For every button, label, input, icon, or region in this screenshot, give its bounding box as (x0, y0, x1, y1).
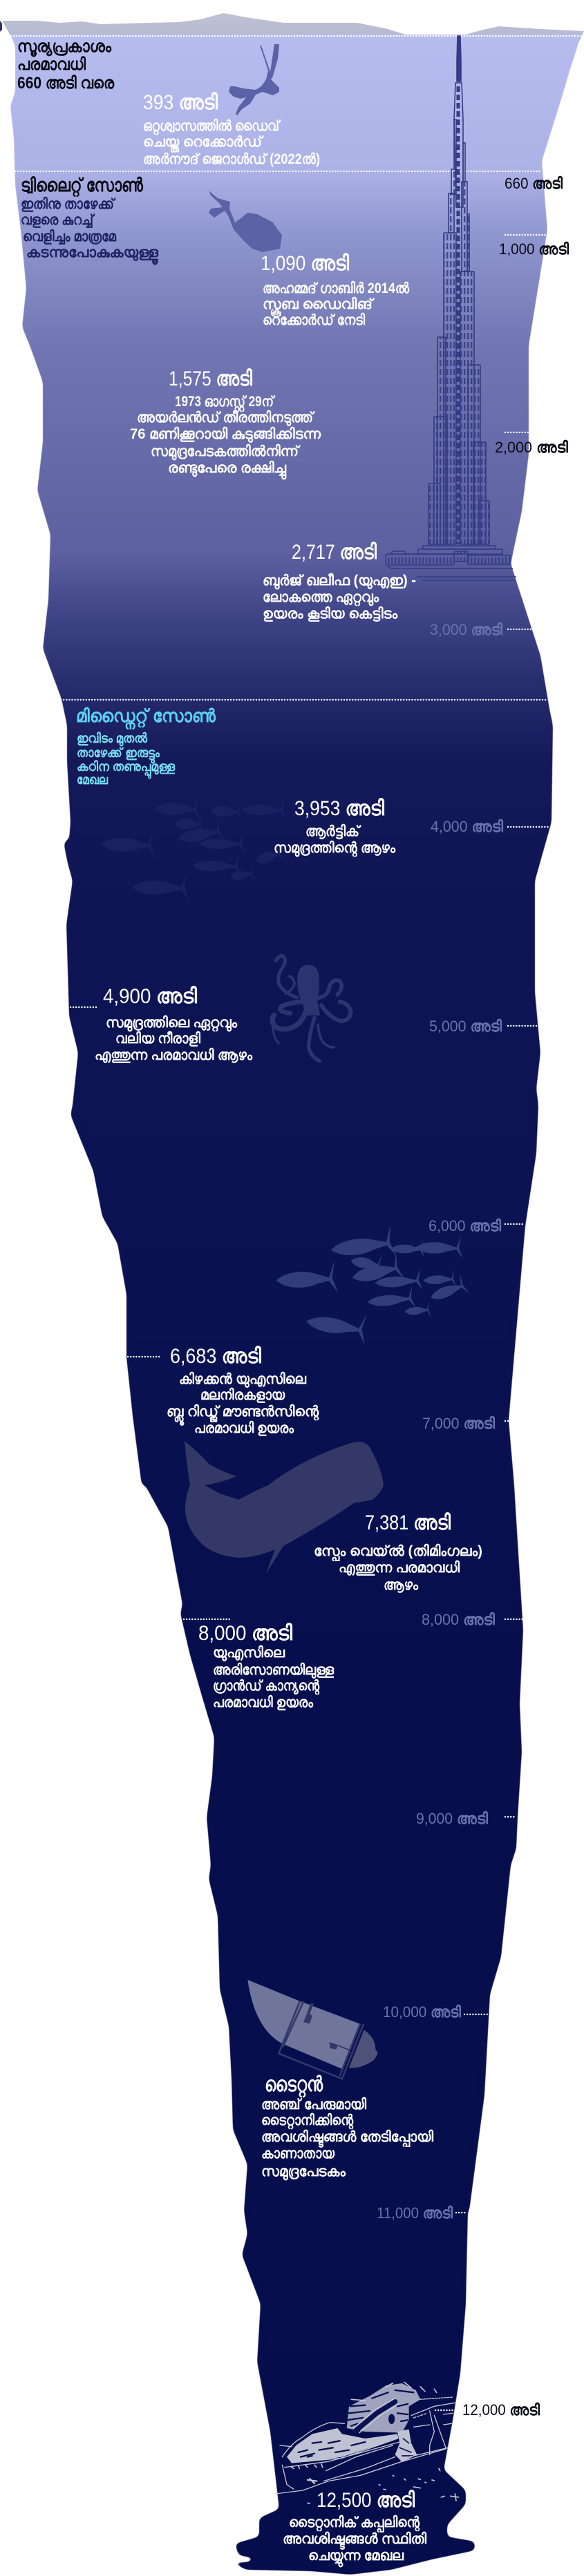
callout: 12500 ft Titanic wreck: ടൈറ്റാനിക് കപ്പലിന്റെ (289, 2514, 420, 2533)
callout: 3953 ft Arctic (274, 797, 396, 857)
callout: Titan submersible: അഞ്ച് പേരുമായി (261, 2096, 366, 2112)
icon: Titanic wreck (275, 2382, 458, 2503)
label: 12000 ft: 12,000 അടി (462, 2401, 540, 2418)
callout: 1575 ft rescue: 1973 ഓഗസ്റ്റ് 29ന് (175, 394, 276, 412)
callout: 4900 ft octopus: എത്തുന്ന പരമാവധി ആഴം (95, 1047, 253, 1064)
callout: Titan submersible: കാണാതായ (261, 2146, 335, 2162)
callout: 12500 ft Titanic wreck: ചെയ്യുന്ന മേഖല (308, 2548, 404, 2568)
heading: sunlight zone: 660 അടി വരെ (17, 74, 115, 93)
callout: 1575 ft rescue: രണ്ടുപേരെ രക്ഷിച്ചു (168, 459, 287, 480)
callout: 1575 ft rescue (130, 368, 321, 480)
callout: 2717 ft Burj Khalifa (263, 541, 416, 622)
callout: 1575 ft rescue: അയർലൻഡ് തീരത്തിനടുത്ത് (137, 409, 315, 426)
callout: 2717 ft Burj Khalifa: ബുർജ് ഖലീഫ (യുഎഇ) - (263, 572, 416, 589)
icon: scuba diver (209, 191, 282, 252)
callout: 7381 ft sperm whale: ആഴം (384, 1577, 419, 1594)
callout: 3953 ft Arctic: 3,953 അടി (294, 797, 384, 820)
callout: Titan submersible (261, 2073, 433, 2180)
heading: twilight zone: ഇതിനു താഴേക്ക് (21, 195, 116, 212)
callout: 1090 ft scuba record: റെക്കോർഡ് നേടി (263, 312, 365, 328)
label: 660 ft: 660 അടി (505, 175, 563, 192)
callout: 4900 ft octopus: വലിയ നീരാളി (115, 1030, 200, 1047)
callout: 8000 ft Grand Canyon: യുഎസിലെ (213, 1644, 285, 1661)
callout: 2717 ft Burj Khalifa: ഉയരം കൂടിയ കെട്ടിടം (263, 605, 398, 622)
icon: faint fish school (101, 796, 286, 901)
callout: 7381 ft sperm whale: സ്പേം വെയ്ൽ (തിമിംഗലം) (314, 1543, 482, 1562)
heading: sunlight zone (17, 37, 115, 93)
callout: 393 ft free dive record: ചെയ്ത റെക്കോർഡ് (143, 134, 264, 153)
callout: Titan submersible: ടൈറ്റൻ (265, 2073, 323, 2098)
icon: Burj Khalifa tower (386, 36, 516, 580)
callout: 1575 ft rescue: 76 മണിക്കൂറായി കുടുങ്ങിക്കിടന്ന (130, 426, 321, 443)
callout: 8000 ft Grand Canyon: അരിസോണയിലുള്ള (213, 1661, 335, 1679)
heading: midnight zone: താഴേക്ക് ഇരുട്ടും (77, 746, 160, 764)
callout: 1090 ft scuba record: സ്കൂബ ഡൈവിങ് (263, 296, 375, 317)
callout: 7381 ft sperm whale (314, 1511, 482, 1594)
label: 11000 ft: 11,000 അടി (377, 2204, 453, 2222)
icon: Titan submersible (247, 1980, 378, 2079)
label: 4000 ft: 4,000 അടി (431, 818, 503, 835)
heading: midnight zone: മിഡ്നൈറ്റ് സോൺ (76, 705, 216, 729)
callout: 4900 ft octopus (95, 985, 253, 1064)
heading: twilight zone: വെളിച്ചം മാത്രമേ (23, 228, 117, 245)
label: 3000 ft: 3,000 അടി (430, 621, 502, 638)
label: 10000 ft: 10,000 അടി (383, 2003, 461, 2021)
callout: 1575 ft rescue: 1,575 അടി (169, 368, 252, 390)
callout: 8000 ft Grand Canyon: 8,000 അടി (198, 1622, 292, 1645)
callout: 393 ft free dive record: ഒറ്റശ്വാസത്തിൽ ഡൈവ് (143, 117, 281, 135)
callout: 8000 ft Grand Canyon: പരമാവധി ഉയരം (213, 1694, 314, 1711)
heading: twilight zone: ട്വിലൈറ്റ് സോൺ (21, 175, 144, 198)
label: 6000 ft: 6,000 അടി (428, 1217, 501, 1234)
heading: midnight zone: ഇവിടം മുതൽ (77, 731, 148, 747)
label: 5000 ft: 5,000 അടി (429, 1018, 502, 1035)
callout: Titan submersible: അവശിഷ്ടങ്ങൾ തേടിപ്പോയി (261, 2128, 433, 2148)
callout: 12500 ft Titanic wreck: 12,500 അടി (317, 2489, 415, 2512)
callout: 8000 ft Grand Canyon: ഗ്രാൻഡ് കാന്യന്റെ (213, 1678, 320, 1695)
callout: 7381 ft sperm whale: എത്തുന്ന പരമാവധി (339, 1559, 460, 1576)
heading: midnight zone: കഠിന തണുപ്പുമുള്ള (77, 759, 176, 779)
callout: 8000 ft Grand Canyon (198, 1622, 335, 1711)
surface edge mark (0, 21, 2, 32)
heading: twilight zone: കടന്നുപോകുകയുള്ളൂ (26, 245, 159, 265)
callout: 6683 ft Blue Ridge: പരമാവധി ഉയരം (194, 1420, 294, 1437)
label: 7000 ft: 7,000 അടി (422, 1415, 495, 1432)
heading: sunlight zone: പരമാവധി (17, 55, 86, 74)
callout: 1575 ft rescue: സമുദ്രപേടകത്തിൽനിന്ന് (151, 443, 301, 460)
callout: 6683 ft Blue Ridge (167, 1345, 319, 1437)
callout: 3953 ft Arctic: സമുദ്രത്തിന്റെ ആഴം (274, 839, 396, 857)
icon: free diver (229, 44, 279, 115)
callout: 12500 ft Titanic wreck: അവശിഷ്ടങ്ങൾ സ്ഥിതി (283, 2530, 426, 2550)
callout: Titan submersible: ടൈറ്റാനിക്കിന്റെ (261, 2112, 354, 2130)
heading: midnight zone: മേഖല (77, 773, 109, 788)
callout: 1090 ft scuba record: അഹമ്മദ് ഗാബിർ 2014ൽ (263, 280, 410, 296)
callout: 393 ft free dive record: 393 അടി (143, 91, 218, 114)
icon: fish school (275, 1224, 469, 1344)
callout: Titan submersible: സമുദ്രപേടകം (261, 2164, 346, 2180)
callout: 1090 ft scuba record: 1,090 അടി (261, 252, 349, 275)
callout: 3953 ft Arctic: ആർട്ടിക് (305, 823, 361, 840)
icon: octopus (272, 956, 350, 1061)
callout: 4900 ft octopus: സമുദ്രത്തിലെ ഏറ്റവും (106, 1014, 238, 1032)
callout: 2717 ft Burj Khalifa: ലോകത്തെ ഏറ്റവും (263, 589, 379, 607)
callout: 2717 ft Burj Khalifa: 2,717 അടി (292, 541, 377, 564)
heading: midnight zone (76, 705, 216, 788)
water surface (2, 13, 584, 41)
icon: sperm whale (185, 1441, 384, 1574)
callout: 6683 ft Blue Ridge: കിഴക്കൻ യുഎസിലെ (179, 1371, 307, 1388)
heading: sunlight zone: സൂര്യപ്രകാശം (17, 37, 112, 57)
label: 1000 ft: 1,000 അടി (499, 240, 569, 258)
callout: 393 ft free dive record: അർനൗദ് ജെറാൾഡ് (2022ൽ) (143, 151, 320, 167)
callout: 393 ft free dive record (143, 91, 320, 167)
callout: 7381 ft sperm whale: 7,381 അടി (365, 1511, 451, 1534)
label: 9000 ft: 9,000 അടി (416, 1810, 488, 1827)
label: 8000 ft: 8,000 അടി (422, 1611, 495, 1628)
heading: twilight zone (21, 175, 159, 265)
callout: 12500 ft Titanic wreck (283, 2489, 426, 2568)
heading: twilight zone: വളരെ കുറച്ച് (21, 212, 95, 228)
callout: 6683 ft Blue Ridge: ബ്ലൂ റിഡ്ജ് മൗണ്ടൻസിന്റെ (167, 1403, 319, 1427)
callout: 6683 ft Blue Ridge: 6,683 അടി (170, 1345, 261, 1368)
callout: 6683 ft Blue Ridge: മലനിരകളായ (200, 1386, 285, 1403)
label: 2000 ft: 2,000 അടി (495, 439, 568, 456)
callout: 1090 ft scuba record (261, 252, 410, 328)
callout: 4900 ft octopus: 4,900 അടി (103, 985, 197, 1008)
